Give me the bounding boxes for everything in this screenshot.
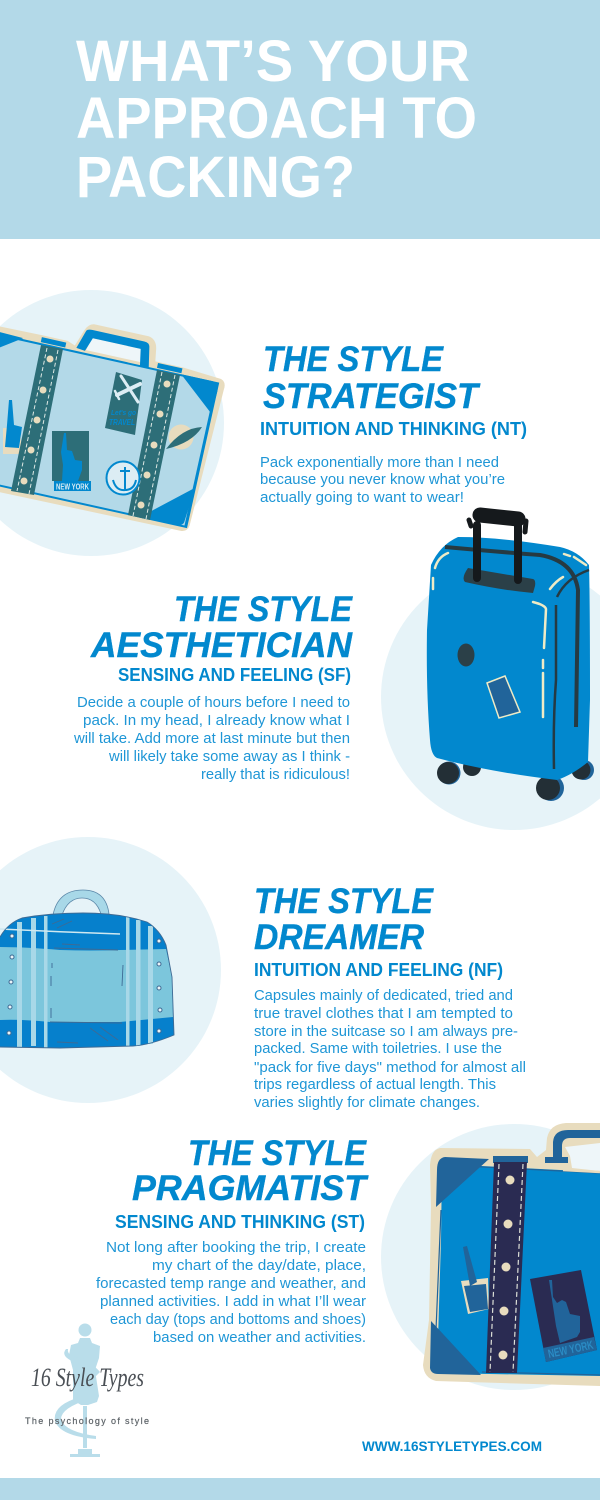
suitcase strap (486, 1162, 527, 1373)
body text: really that is ridiculous! (201, 766, 350, 783)
heading: THE STYLE (174, 590, 354, 629)
title: WHAT’S YOUR (76, 29, 470, 94)
panel: the style aesthetician (73, 515, 600, 830)
body text (254, 987, 526, 1111)
heading: AESTHETICIAN (90, 626, 353, 665)
subheading: INTUITION AND THINKING (NT) (260, 418, 527, 439)
body text: Capsules mainly of dedicated, tried and (254, 987, 513, 1004)
subheading: SENSING AND THINKING (ST) (115, 1211, 365, 1232)
header band (0, 0, 600, 239)
body text: store in the suitcase so I am always pre- (254, 1023, 518, 1040)
body text: trips regardless of actual length. This (254, 1076, 496, 1093)
heading: PRAGMATIST (132, 1169, 369, 1208)
subheading: SENSING AND FEELING (SF) (118, 664, 351, 685)
subheading: INTUITION AND FEELING (NF) (254, 959, 503, 980)
heading: DREAMER (254, 918, 425, 957)
body text (73, 694, 350, 783)
body text: each day (tops and bottoms and shoes) (110, 1311, 366, 1328)
icon: blue duffel bag (0, 837, 221, 1103)
body text (260, 454, 505, 506)
website url: WWW.16STYLETYPES.COM (362, 1438, 542, 1454)
suitcase straps (11, 345, 180, 520)
body text: based on weather and activities. (153, 1329, 366, 1346)
sticker: let's go travel (105, 372, 142, 435)
body text: Not long after booking the trip, I create (106, 1239, 366, 1256)
panel: the style dreamer (0, 837, 526, 1111)
body text: actually going to want to wear! (260, 489, 464, 506)
body text: Pack exponentially more than I need (260, 454, 499, 471)
heading: STRATEGIST (263, 377, 481, 416)
heading (132, 1134, 369, 1208)
body text: pack. In my head, I already know what I (83, 712, 350, 729)
body text: true travel clothes that I am tempted to (254, 1005, 513, 1022)
body text: my chart of the day/date, place, (152, 1257, 366, 1274)
body text (96, 1239, 366, 1346)
sticker: let's go travel: Let's go (111, 410, 137, 417)
sticker: anchor (106, 462, 140, 494)
sticker: new york (530, 1270, 597, 1362)
heading (90, 590, 354, 665)
suitcase telescopic handle (469, 515, 526, 580)
sticker: building (3, 400, 22, 454)
heading: THE STYLE (188, 1134, 368, 1173)
sticker: building (461, 1246, 489, 1314)
body text: forecasted temp range and weather, and (96, 1275, 366, 1292)
heading (263, 340, 481, 416)
body text: varies slightly for climate changes. (254, 1094, 480, 1111)
title (76, 29, 477, 210)
body text: will take. Add more at last minute but then (73, 730, 350, 747)
logo: 16 Style Types (25, 1324, 149, 1457)
body text: Decide a couple of hours before I need to (77, 694, 350, 711)
panel: the style pragmatist (96, 1123, 600, 1390)
heading: THE STYLE (263, 340, 445, 379)
sticker: surfboard (166, 424, 202, 450)
body text: packed. Same with toiletries. I use the (254, 1040, 502, 1057)
logo wordmark: 16 Style Types (31, 1363, 144, 1392)
icon: dress form (55, 1324, 100, 1457)
heading: THE STYLE (254, 882, 435, 921)
icon: blue roller suitcase (381, 515, 600, 830)
body text: because you never know what you’re (260, 471, 505, 488)
title: PACKING? (76, 145, 355, 210)
body text: "pack for five days" method for almost all (254, 1059, 526, 1076)
logo tagline: The psychology of style (25, 1416, 149, 1426)
icon: bright blue suitcase with navy strap (381, 1123, 600, 1390)
body text: planned activities. I add in what I’ll wear (100, 1293, 366, 1310)
icon: light blue suitcase with stickers (0, 290, 232, 556)
heading (254, 882, 435, 957)
sticker: new york (52, 431, 91, 492)
footer band (0, 1478, 600, 1500)
title: APPROACH TO (76, 86, 477, 151)
body text: will likely take some away as I think - (108, 748, 350, 765)
panel: the style strategist (0, 290, 527, 556)
sticker: let's go travel: TRAVEL (109, 418, 135, 427)
sticker: new york: NEW YORK (56, 482, 89, 492)
